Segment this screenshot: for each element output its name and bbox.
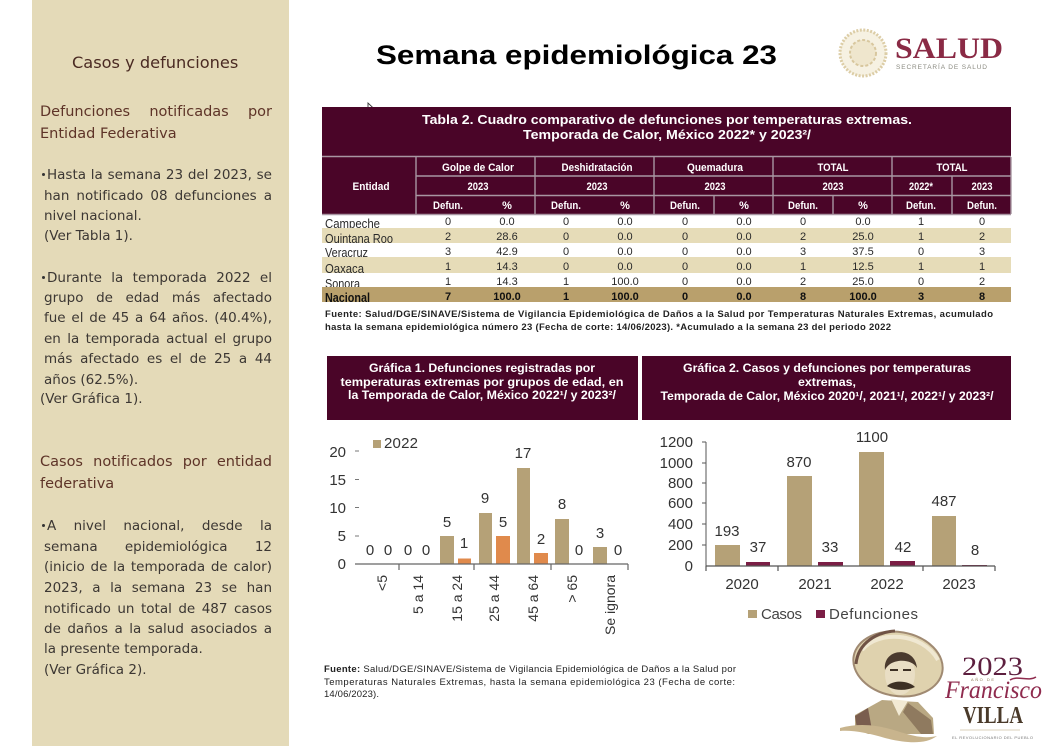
table row: Quintana Roo: 2 xyxy=(445,231,451,243)
table column headers: TOTAL xyxy=(936,162,968,174)
bar chart: casos y defunciones xyxy=(660,429,995,623)
table row: Veracruz: 3 xyxy=(800,246,806,258)
chart 2 value labels: 1100 xyxy=(856,429,888,446)
table column headers: Defun. xyxy=(906,200,936,212)
table column headers xyxy=(322,156,1011,214)
chart heading: Gráfica 2: extremas, xyxy=(798,377,856,389)
chart 1 value labels: 5 xyxy=(499,514,507,531)
table column headers: Defun. xyxy=(788,200,818,212)
table row: Oaxaca xyxy=(322,257,1011,276)
table column headers: Defun. xyxy=(551,200,581,212)
table row: Nacional: 3 xyxy=(918,291,924,303)
chart 2 category labels: 2020 xyxy=(725,576,759,593)
text block: bullet semana 23: Hasta la semana 23 del 2023, se xyxy=(47,167,272,183)
chart 2 value labels xyxy=(714,429,979,559)
text block: bullet nivel nacional xyxy=(42,518,272,678)
table row: Sonora: 2 xyxy=(979,276,985,288)
icon: cursor xyxy=(368,103,376,116)
panel: sidebar xyxy=(32,0,289,746)
text block: bullet temporada 2022 xyxy=(40,270,272,407)
table column headers: Golpe de Calor xyxy=(442,162,515,174)
chart heading: Gráfica 2 xyxy=(642,356,1011,420)
chart 1 category labels: 45 a 64 xyxy=(525,575,541,622)
logo: 2023 Año de Francisco Villa: AÑO DE xyxy=(971,677,994,682)
sidebar subheading: casos: federativa xyxy=(40,476,114,492)
table row: Veracruz: 3 xyxy=(979,246,985,258)
table column headers: 2023 xyxy=(468,181,488,193)
chart 1 value labels: 0 xyxy=(384,542,392,559)
table row: Nacional: 0 xyxy=(682,291,688,303)
table row: Quintana Roo: 2 xyxy=(979,231,985,243)
table row: Nacional: Nacional xyxy=(325,291,370,305)
table row: Veracruz: 0 xyxy=(918,246,924,258)
logo: Salud: SECRETARÍA DE SALUD xyxy=(896,62,987,71)
chart 1 bars xyxy=(440,468,607,564)
text block: bullet temporada 2022: fue el de 45 a 64 años. (40.4%), xyxy=(44,310,272,326)
chart 1 category labels: 5 a 14 xyxy=(410,575,426,614)
logo: Salud xyxy=(840,30,1003,76)
chart 2 category labels: 2022 xyxy=(870,576,904,593)
chart 1 y axis: 20 xyxy=(329,444,346,461)
chart 2 y axis: 200 xyxy=(668,537,693,554)
text block: bullet nivel nacional: 2023, a la semana 23 se han xyxy=(44,580,272,596)
chart heading: Gráfica 1: la Temporada de Calor, México 2022¹/ y 2023²/ xyxy=(348,390,617,402)
chart 1 y axis: 15 xyxy=(329,472,346,489)
chart 1 value labels: 9 xyxy=(481,490,489,507)
sidebar subheading: defunciones: Defunciones notificadas por xyxy=(40,104,272,120)
chart 1 x axis xyxy=(355,564,628,570)
table column headers: Defun. xyxy=(433,200,463,212)
table row: Quintana Roo: 1 xyxy=(918,231,924,243)
chart 2 value labels: 870 xyxy=(786,454,812,471)
text block: bullet temporada 2022: Durante la temporada 2022 el xyxy=(47,270,272,286)
text block: bullet nivel nacional: (Ver Gráfica 2). xyxy=(44,662,147,678)
chart 2 value labels: 37 xyxy=(750,539,766,556)
chart source note: 14/06/2023). xyxy=(324,689,379,700)
chart 2 value labels: 193 xyxy=(714,523,740,540)
chart 2 y axis: 1200 xyxy=(660,434,693,451)
table row: Campeche: 0 xyxy=(800,216,806,228)
table column headers: Entidad xyxy=(352,181,390,193)
logo: 2023 Año de Francisco Villa: 2023 xyxy=(962,652,1023,681)
table row: Oaxaca: 0 xyxy=(682,261,688,273)
chart heading: Gráfica 2: Temporada de Calor, México 2020¹/, 2021¹/, 2022¹/ y 2023²/ xyxy=(660,391,994,403)
chart 2 y axis: 0 xyxy=(685,558,693,575)
text block: bullet semana 23 xyxy=(42,167,272,244)
table row: Sonora: 25.0 xyxy=(852,276,874,288)
table row: Veracruz: Veracruz xyxy=(325,246,368,260)
table source note: hasta la semana epidemiológica número 23 (Fecha de corte: 14/06/2023). *Acumulado a la semana 23 del periodo 2022 xyxy=(325,322,891,333)
table row: Sonora: 2 xyxy=(800,276,806,288)
logo: 2023 Año de Francisco Villa: Francisco xyxy=(944,677,1042,704)
table row: Nacional xyxy=(322,287,1011,305)
logo: 2023 Año de Francisco Villa: VILLA xyxy=(963,703,1024,729)
logo: Salud: SALUD xyxy=(895,32,1003,65)
table row: Campeche: 0.0 xyxy=(617,216,633,228)
table row: Oaxaca: Oaxaca xyxy=(325,262,364,276)
table source note: Fuente: Salud/DGE/SINAVE/Sistema de Vigilancia Epidemiológica de Daños a la Salud por Temperaturas Naturales Extremas, acumulado xyxy=(325,309,993,320)
chart 2 value labels: 33 xyxy=(822,539,838,556)
table row: Sonora: Sonora xyxy=(325,277,360,291)
chart source note xyxy=(324,664,736,700)
table row: Quintana Roo: 2 xyxy=(800,231,806,243)
chart 1 value labels: 0 xyxy=(404,542,412,559)
chart heading: Gráfica 1 xyxy=(327,356,638,420)
sidebar heading: Casos y defunciones xyxy=(72,53,238,72)
chart 2 category labels: 2023 xyxy=(942,576,976,593)
chart 1 value labels: 5 xyxy=(443,514,451,531)
chart 1 category labels: <5 xyxy=(374,575,390,591)
chart 2 value labels: 8 xyxy=(971,542,979,559)
table row: Veracruz: 42.9 xyxy=(496,246,518,258)
title: Semana epidemiológica 23 xyxy=(376,40,777,70)
chart 1 value labels: 0 xyxy=(366,542,374,559)
chart 1 value labels: 0 xyxy=(614,542,622,559)
table row: Oaxaca: 1 xyxy=(800,261,806,273)
table row: Oaxaca: 14.3 xyxy=(496,261,518,273)
chart heading: Gráfica 2: Gráfica 2. Casos y defunciones por temperaturas xyxy=(683,363,971,375)
chart 1 category labels: Se ignora xyxy=(602,575,618,635)
table row: Nacional: 100.0 xyxy=(493,291,521,303)
table row: Quintana Roo: 28.6 xyxy=(496,231,518,243)
chart 1 value labels xyxy=(366,445,622,559)
table column headers: Deshidratación xyxy=(562,162,633,174)
sidebar subheading: casos: Casos notificados por entidad xyxy=(40,454,272,470)
chart 1 value labels: 2 xyxy=(537,531,545,548)
table row: Nacional: 1 xyxy=(563,291,569,303)
text block: bullet semana 23: han notificado 08 defunciones a xyxy=(44,188,272,204)
chart 1 value labels: 0 xyxy=(422,542,430,559)
chart 2 legend: Casos xyxy=(761,606,802,623)
table column headers: % xyxy=(502,200,512,212)
table column headers: 2023 xyxy=(972,181,992,193)
chart 2 category labels xyxy=(725,576,976,593)
chart 1 category labels xyxy=(374,575,618,635)
table column headers: 2023 xyxy=(704,181,726,193)
table row: Campeche: 0 xyxy=(563,216,569,228)
chart 1 legend: 2022 xyxy=(384,435,418,452)
table heading: Tabla 2: Tabla 2. Cuadro comparativo de defunciones por temperaturas extremas. xyxy=(422,113,912,127)
table row: Campeche: 0 xyxy=(979,216,985,228)
table column headers: TOTAL xyxy=(818,162,849,174)
table row: Oaxaca: 1 xyxy=(979,261,985,273)
illustration: Francisco Villa portrait xyxy=(840,625,948,742)
table row: Oaxaca: 0.0 xyxy=(736,261,752,273)
table row: Veracruz: 37.5 xyxy=(852,246,874,258)
chart source note: Temperaturas Naturales Extremas, hasta la semana epidemiológica 23 (Fecha de corte: xyxy=(324,677,735,688)
text block: bullet nivel nacional: la presente temporada. xyxy=(44,641,203,657)
table row: Quintana Roo: 0 xyxy=(682,231,688,243)
table row: Campeche: 1 xyxy=(918,216,924,228)
table row: Nacional: 100.0 xyxy=(849,291,877,303)
text block: bullet nivel nacional: notificado un total de 487 casos xyxy=(44,601,272,617)
sidebar subheading: casos xyxy=(40,454,272,492)
chart 2 y axis: 400 xyxy=(668,516,693,533)
chart 1 value labels: 8 xyxy=(558,496,566,513)
text block: bullet semana 23: (Ver Tabla 1). xyxy=(44,228,133,244)
text block: bullet semana 23: nivel nacional. xyxy=(44,208,142,224)
table row: Veracruz xyxy=(322,243,1011,260)
table column headers: Defun. xyxy=(967,200,997,212)
chart 1 category labels: > 65 xyxy=(564,575,580,603)
table column headers: Defun. xyxy=(670,200,700,212)
table row: Oaxaca: 1 xyxy=(918,261,924,273)
table row: Nacional: 7 xyxy=(445,291,451,303)
table row: Campeche: 0.0 xyxy=(736,216,752,228)
table row: Quintana Roo: 0 xyxy=(563,231,569,243)
chart 2 y axis xyxy=(660,434,706,575)
table row: Sonora xyxy=(322,273,1011,291)
table row: Sonora: 100.0 xyxy=(611,276,639,288)
table row: Veracruz: 3 xyxy=(445,246,451,258)
table row: Veracruz: 0.0 xyxy=(736,246,752,258)
chart source note: Fuente: Salud/DGE/SINAVE/Sistema de Vigilancia Epidemiológica de Daños a la Salud por xyxy=(324,664,736,675)
sidebar subheading: defunciones xyxy=(40,104,272,142)
text block: bullet temporada 2022: en la temporada actual el grupo xyxy=(44,331,272,347)
chart 2 value labels: 487 xyxy=(931,493,957,510)
table column headers: 2022* xyxy=(909,181,934,193)
table row: Campeche: 0 xyxy=(445,216,451,228)
table row: Oaxaca: 12.5 xyxy=(852,261,874,273)
table column headers: 2023 xyxy=(586,181,608,193)
table column headers: % xyxy=(620,200,630,212)
sidebar subheading: defunciones: Entidad Federativa xyxy=(40,126,177,142)
chart 2 legend xyxy=(748,606,918,623)
table row: Sonora: 0 xyxy=(918,276,924,288)
table heading: Tabla 2: Temporada de Calor, México 2022* y 2023²/ xyxy=(523,128,812,142)
table column headers: % xyxy=(739,200,749,212)
table row: Sonora: 1 xyxy=(563,276,569,288)
chart 2 y axis: 800 xyxy=(668,475,693,492)
logo: 2023 Año de Francisco Villa xyxy=(840,625,1042,742)
table row: Sonora: 1 xyxy=(445,276,451,288)
chart 2 x axis xyxy=(706,566,995,571)
table row: Nacional: 0.0 xyxy=(736,291,752,303)
table heading: Tabla 2 xyxy=(322,107,1011,156)
table row: Veracruz: 0.0 xyxy=(617,246,633,258)
table column headers: % xyxy=(858,200,868,212)
chart 1 category labels: 25 a 44 xyxy=(486,575,502,622)
text block: bullet nivel nacional: de daños a la salud asociados a xyxy=(44,621,272,637)
chart 1 y axis: 0 xyxy=(338,556,346,573)
chart 1 value labels: 0 xyxy=(575,542,583,559)
table row: Nacional: 100.0 xyxy=(611,291,639,303)
table row: Nacional: 8 xyxy=(800,291,806,303)
chart 1 value labels: 3 xyxy=(596,525,604,542)
text block: bullet nivel nacional: semana epidemiológica 12 xyxy=(44,539,272,555)
text block: bullet nivel nacional: A nivel nacional, desde la xyxy=(47,518,272,534)
table column headers: Quemadura xyxy=(687,162,744,174)
table row: Quintana Roo: Quintana Roo xyxy=(325,232,393,246)
table row: Sonora: 0 xyxy=(682,276,688,288)
table row: Oaxaca: 0 xyxy=(563,261,569,273)
table row: Campeche: 0.0 xyxy=(499,216,515,228)
chart 2 y axis: 1000 xyxy=(660,455,693,472)
logo: 2023 Año de Francisco Villa: EL REVOLUCIONARIO DEL PUEBLO xyxy=(952,735,1033,740)
table row: Campeche: 0.0 xyxy=(855,216,871,228)
table row: Oaxaca: 1 xyxy=(445,261,451,273)
text block: bullet temporada 2022: años (62.5%). xyxy=(44,372,138,388)
table row: Campeche: 0 xyxy=(682,216,688,228)
chart 2 legend: Defunciones xyxy=(829,606,918,623)
table row: Quintana Roo: 0.0 xyxy=(617,231,633,243)
chart 2 y axis: 600 xyxy=(668,495,693,512)
chart heading: Gráfica 1: temperaturas extremas por grupos de edad, en xyxy=(340,377,624,389)
table row: Nacional: 8 xyxy=(979,291,985,303)
chart 1 y axis xyxy=(329,444,359,573)
chart 1 category labels: 15 a 24 xyxy=(449,575,465,622)
table row: Quintana Roo: 25.0 xyxy=(852,231,874,243)
chart 1 y axis: 5 xyxy=(338,528,346,545)
table row: Quintana Roo: 0.0 xyxy=(736,231,752,243)
chart 2 category labels: 2021 xyxy=(798,576,832,593)
table row: Oaxaca: 0.0 xyxy=(617,261,633,273)
table source note xyxy=(325,309,993,333)
text block: bullet temporada 2022: grupo de edad más afectado xyxy=(44,290,272,306)
table row: Campeche: Campeche xyxy=(325,217,380,231)
table row: Campeche xyxy=(325,216,985,231)
table: defunciones por entidad xyxy=(322,156,1011,305)
text block: bullet temporada 2022: más afectado es el de 25 a 44 xyxy=(44,351,272,367)
table row: Sonora: 14.3 xyxy=(496,276,518,288)
table row: Quintana Roo xyxy=(322,228,1011,246)
chart 1 value labels: 1 xyxy=(460,535,468,552)
table row: Veracruz: 0 xyxy=(563,246,569,258)
chart 2 value labels: 42 xyxy=(895,539,911,556)
table column headers: 2023 xyxy=(822,181,844,193)
chart 1 y axis: 10 xyxy=(329,500,346,517)
chart 2 bars xyxy=(715,452,987,566)
text block: bullet temporada 2022: (Ver Gráfica 1). xyxy=(40,391,143,407)
chart heading: Gráfica 1: Gráfica 1. Defunciones registradas por xyxy=(369,363,596,375)
text block: bullet nivel nacional: (inicio de la temporada de calor) xyxy=(44,559,272,575)
chart 1 value labels: 17 xyxy=(515,445,531,462)
bar chart: defunciones por grupos de edad xyxy=(329,435,628,635)
table row: Veracruz: 0 xyxy=(682,246,688,258)
table row: Sonora: 0.0 xyxy=(736,276,752,288)
